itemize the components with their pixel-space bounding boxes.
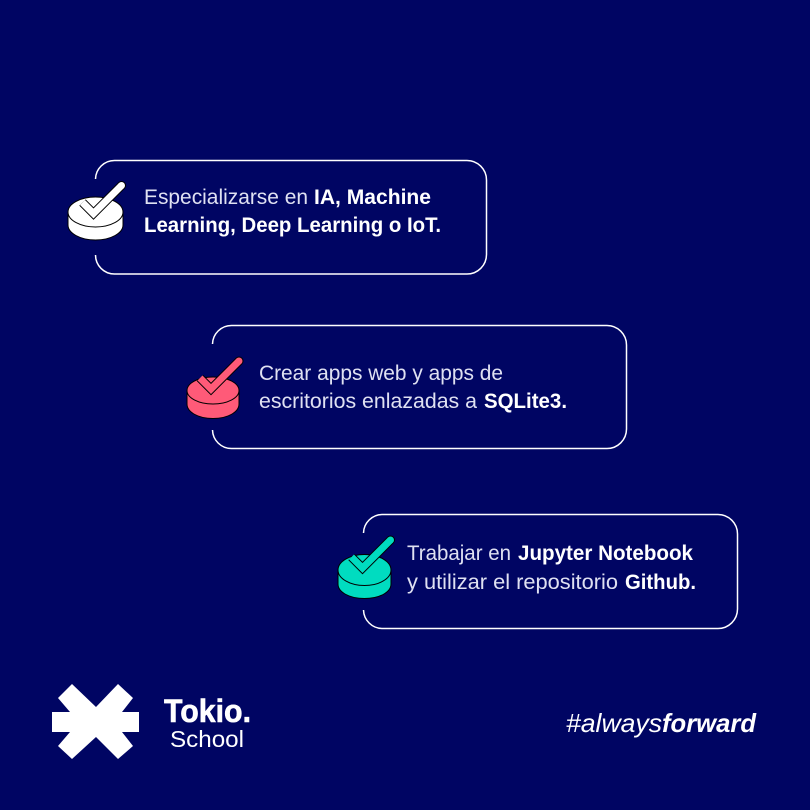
text: jupyter: Jupyter Notebook [518,541,693,565]
text: jupyter: y utilizar el repositorio [407,570,618,594]
hashtag [566,708,757,738]
logo wordmark: Tokio. [164,693,251,729]
text: crear apps: SQLite3. [484,389,567,413]
panel outline 3 [364,514,738,628]
hashtag: #always [566,708,662,738]
text: especializarse: Especializarse en [144,185,308,209]
text: especializarse: Learning, Deep Learning o IoT. [144,213,441,237]
panel outline 1 [96,160,486,274]
logo wordmark [164,693,251,752]
hashtag: forward [662,708,757,738]
text: crear apps: Crear apps web y apps de [259,361,503,385]
icon: white check disc [68,181,126,240]
text: especializarse [144,185,441,237]
text: especializarse: IA, Machine [314,185,431,209]
text: jupyter: Trabajar en [407,541,511,565]
panel: crear apps [187,326,626,448]
text: crear apps [259,361,567,413]
text: jupyter [407,541,696,594]
text: jupyter: Github. [625,570,696,594]
icon: teal check disc [338,536,395,598]
panel outline 2 [212,326,626,448]
panel: especializarse [68,160,486,274]
icon: logo X [52,684,139,759]
icon: pink check disc [187,356,244,418]
text: crear apps: escritorios enlazadas a [259,389,477,413]
panel: jupyter [338,514,738,628]
logo: Tokio School [52,684,251,759]
logo wordmark: School [170,726,244,752]
